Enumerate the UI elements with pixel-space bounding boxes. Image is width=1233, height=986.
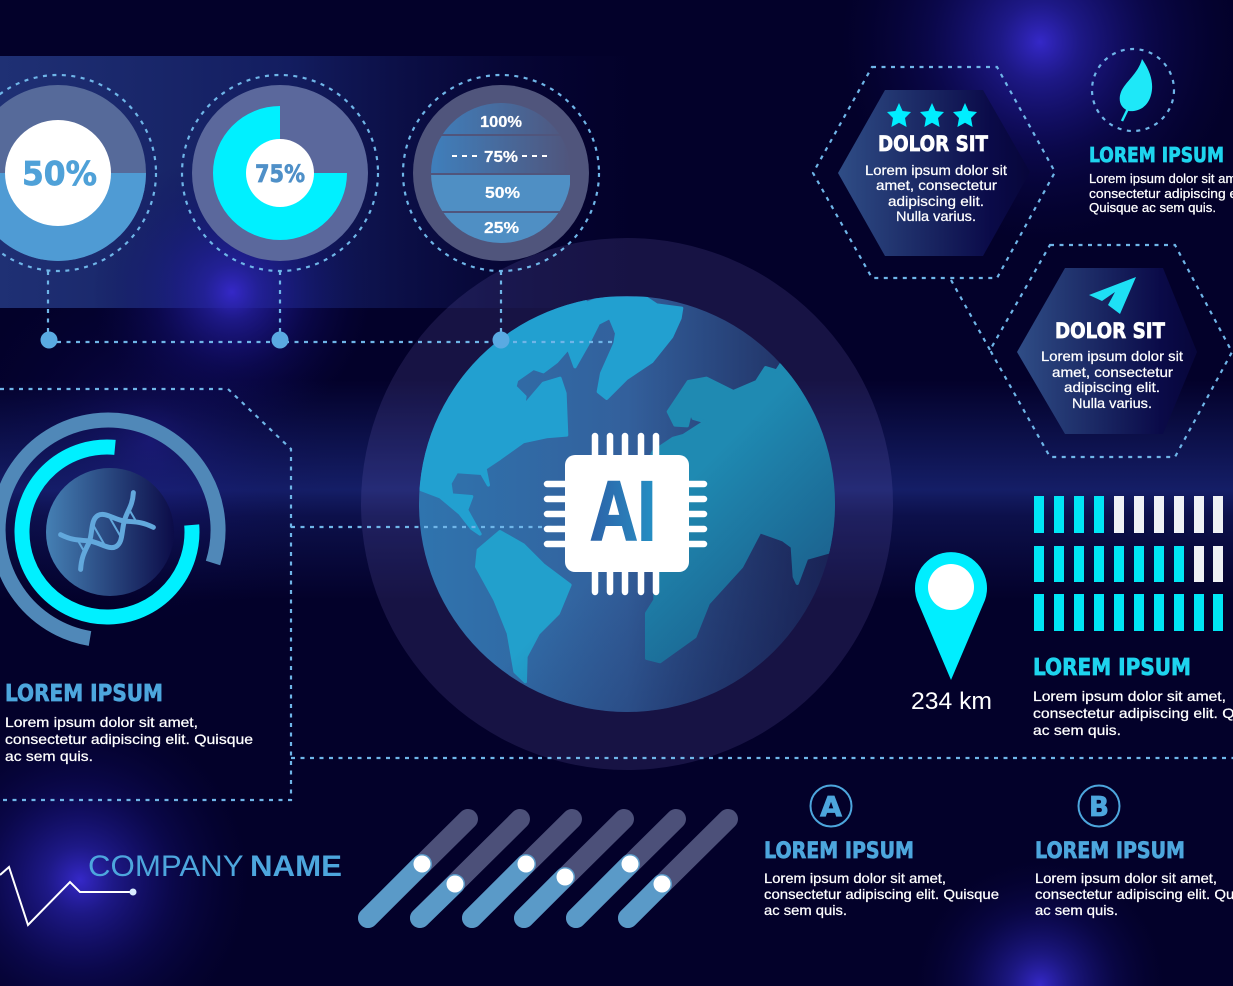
heading: DOLOR SIT xyxy=(878,132,989,156)
slider knobs xyxy=(414,856,670,892)
glow xyxy=(92,152,372,432)
value: 75%: 75% xyxy=(255,160,305,188)
icon: paper plane xyxy=(1089,277,1136,314)
company name: COMPANY xyxy=(88,850,244,883)
icon: B badge xyxy=(1078,786,1120,826)
chart: bar rows xyxy=(1034,496,1223,631)
body text: adipiscing elit. xyxy=(1064,379,1160,395)
body text xyxy=(865,162,1007,224)
level labels: 50% xyxy=(485,185,520,202)
chip label: AI xyxy=(590,464,656,558)
heading: DOLOR SIT xyxy=(1055,319,1166,343)
block A: LOREM IPSUM xyxy=(764,839,914,864)
text: right block: LOREM IPSUM xyxy=(1033,655,1191,681)
body text: Lorem ipsum dolor sit xyxy=(865,162,1007,178)
body text: Nulla varius. xyxy=(1072,395,1152,411)
chart: 75% donut xyxy=(182,75,378,271)
hexagon link xyxy=(951,280,990,350)
body text: Lorem ipsum dolor sit xyxy=(1041,348,1183,364)
top panel backdrop xyxy=(0,56,640,308)
chart: 50% gauge xyxy=(0,75,156,271)
text: top right block: Quisque ac sem quis. xyxy=(1089,200,1216,215)
icon: DNA rings xyxy=(0,420,218,638)
block A: consectetur adipiscing elit. Quisque xyxy=(764,886,999,902)
icon: B badge: B xyxy=(1089,790,1109,823)
text: left block: consectetur adipiscing elit. Quisque xyxy=(5,731,253,747)
text: right block: ac sem quis. xyxy=(1033,722,1121,738)
chart: slanted sliders xyxy=(368,819,728,918)
panel: hexagon one xyxy=(813,67,1055,278)
value: 50%: 50% xyxy=(22,154,97,193)
text: left block: Lorem ipsum dolor sit amet, xyxy=(5,714,198,730)
icon: pulse line xyxy=(0,867,136,925)
panel: left frame xyxy=(0,389,291,800)
icon: A badge: A xyxy=(820,790,842,823)
body text xyxy=(1041,348,1183,411)
block A: Lorem ipsum dolor sit amet, xyxy=(764,870,946,886)
text: right block xyxy=(1033,655,1233,738)
icon: AI chip xyxy=(547,436,704,592)
block B: Lorem ipsum dolor sit amet, xyxy=(1035,870,1217,886)
icon: A badge xyxy=(810,786,852,826)
body text: amet, consectetur xyxy=(876,177,997,193)
text: left block: LOREM IPSUM xyxy=(5,681,163,707)
connector lines xyxy=(48,271,1233,758)
icon: DNA helix xyxy=(61,493,153,569)
icon: location pin xyxy=(911,552,992,715)
globe xyxy=(410,290,847,712)
company name: NAME xyxy=(250,850,342,883)
distance: 234 km xyxy=(911,688,992,715)
body text: adipiscing elit. xyxy=(888,193,984,209)
block A: ac sem quis. xyxy=(764,902,847,918)
globe shading xyxy=(525,406,835,712)
level labels: 100% xyxy=(480,114,522,131)
body text: Nulla varius. xyxy=(896,208,976,224)
globe halo xyxy=(361,238,893,770)
body text: amet, consectetur xyxy=(1052,364,1173,380)
icon: stars xyxy=(887,103,977,127)
block B: LOREM IPSUM xyxy=(1035,839,1185,864)
level labels: 75% xyxy=(484,149,518,166)
text: top right block xyxy=(1089,143,1233,215)
icon: leaf xyxy=(1092,49,1174,131)
block B: ac sem quis. xyxy=(1035,902,1118,918)
connector nodes xyxy=(40,332,510,348)
continents xyxy=(410,290,847,712)
level labels: 25% xyxy=(484,220,519,237)
text: right block: Lorem ipsum dolor sit amet, xyxy=(1033,688,1226,704)
block A xyxy=(764,786,999,918)
text: left block: ac sem quis. xyxy=(5,748,93,764)
chart: level gauge xyxy=(403,75,599,271)
panel: hexagon two xyxy=(990,245,1232,457)
level labels xyxy=(480,114,522,237)
block B xyxy=(1035,786,1233,918)
text: left block xyxy=(5,681,253,764)
